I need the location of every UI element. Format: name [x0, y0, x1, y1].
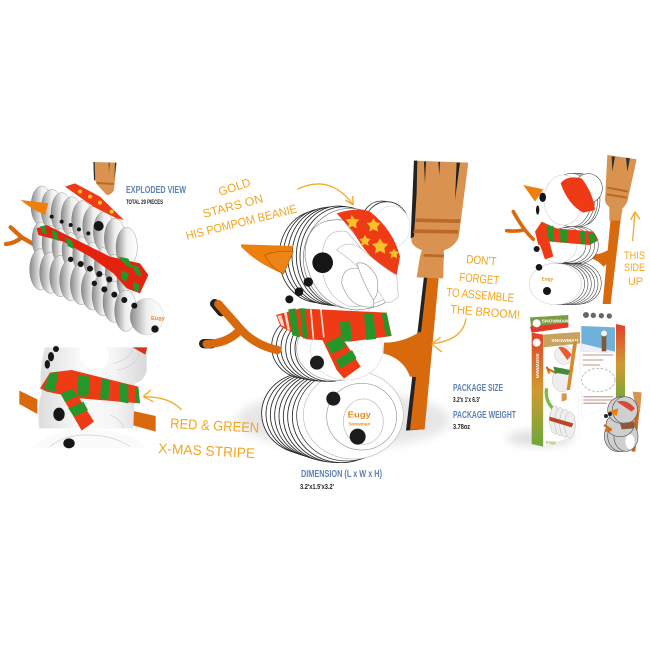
arrow: to broom	[432, 318, 466, 352]
inset hat tip	[133, 347, 147, 355]
hat with gold stars	[337, 210, 400, 275]
button: belly	[326, 392, 340, 406]
small grey snowman	[604, 392, 642, 452]
back view scarf	[535, 222, 598, 259]
back view lower body	[529, 263, 601, 305]
back view buttons	[534, 193, 551, 295]
handwritten note: broom: FORGET	[459, 270, 500, 288]
arrow: to beanie	[297, 184, 353, 205]
handwritten note: this side up: UP	[628, 276, 643, 288]
snout and brim pieces	[337, 244, 398, 307]
caption: total pieces: TOTAL 29 PIECES	[126, 199, 163, 206]
gold stars on hat	[78, 190, 114, 214]
package spine	[532, 333, 543, 447]
pompom	[362, 201, 410, 247]
scarf close-up inset	[19, 346, 182, 448]
handwritten note: broom: DON'T	[466, 252, 497, 269]
package back panel	[580, 310, 625, 417]
floor shadow	[237, 392, 450, 448]
logo piece: Eugy	[151, 316, 166, 322]
handwritten note: broom: THE BROOM!	[450, 302, 521, 322]
main snowman illustration	[204, 161, 468, 463]
arrow: this side up	[631, 212, 640, 241]
eye	[312, 252, 333, 273]
logo on belly: Snowman	[348, 421, 370, 426]
value: package size: 3.2'x 1'x 6.3'	[453, 397, 480, 404]
package front: SNOWMAN	[551, 338, 579, 344]
handwritten note: red and green stripe: X-MAS STRIPE	[158, 440, 256, 461]
product package	[507, 310, 642, 452]
back view head	[544, 173, 602, 227]
face dots	[285, 277, 313, 303]
handwritten note: broom	[446, 252, 521, 322]
back view arm	[507, 212, 533, 239]
snowman lower body	[262, 370, 403, 463]
value: dimension: 3.2'x1.5'x3.2'	[300, 484, 334, 491]
scarf pieces	[37, 225, 148, 293]
inset body	[33, 347, 147, 448]
head	[279, 206, 397, 310]
broom	[406, 161, 468, 431]
handwritten note: gold stars	[184, 175, 298, 243]
value: package weight: 3.78oz	[453, 424, 470, 431]
package top flap: SNOWMAN	[542, 319, 569, 325]
handwritten note: this side up: SIDE	[624, 262, 645, 274]
heading: package size: PACKAGE SIZE	[453, 383, 503, 394]
back view right arm	[586, 250, 610, 267]
handwritten note: gold stars: STARS ON	[201, 191, 265, 221]
handwritten note: this side up: THIS	[624, 250, 645, 262]
button: lower	[350, 429, 366, 445]
back view logo: Eugy	[542, 277, 553, 282]
back view nose	[523, 185, 543, 202]
package shadow	[507, 431, 573, 446]
hat pieces	[65, 183, 124, 220]
nose piece	[21, 200, 48, 215]
back view hat	[561, 177, 595, 213]
handwritten note: gold stars: HIS POMPOM BEANIE	[184, 202, 298, 243]
left arm	[204, 304, 277, 350]
black dots	[50, 215, 159, 333]
snowman middle body	[272, 315, 383, 381]
package top flap	[530, 315, 569, 333]
inset buttons	[45, 346, 75, 448]
slices	[30, 186, 163, 335]
broom top	[93, 162, 117, 195]
handwritten note: broom: TO ASSEMBLE	[446, 285, 515, 305]
handwritten note: red and green stripe	[158, 415, 260, 461]
package spine: SNOWMAN	[535, 353, 540, 379]
exploded view illustration	[6, 162, 166, 335]
heading: package weight: PACKAGE WEIGHT	[453, 410, 516, 421]
logo on belly: Eugy	[348, 409, 371, 419]
heading: dimension: DIMENSION (L x W x H)	[301, 469, 382, 480]
back view broom	[603, 155, 637, 304]
button: chest	[310, 356, 324, 370]
nose	[241, 244, 293, 274]
inset arms	[19, 391, 156, 432]
arrow: to scarf	[143, 390, 182, 410]
heading: exploded view: EXPLODED VIEW	[126, 185, 186, 196]
handwritten note: gold stars: GOLD	[217, 175, 253, 199]
package front: Eugy	[546, 439, 557, 444]
right arm	[383, 332, 431, 377]
inset scarf	[40, 370, 140, 431]
top right snowman view	[507, 155, 640, 305]
left arm piece	[6, 227, 35, 245]
package front	[543, 332, 580, 447]
handwritten note: this side up	[624, 250, 645, 288]
back view middle body	[540, 227, 598, 263]
handwritten note: red and green stripe: RED & GREEN	[170, 415, 260, 436]
logo on belly	[348, 409, 371, 426]
scarf	[276, 308, 392, 379]
